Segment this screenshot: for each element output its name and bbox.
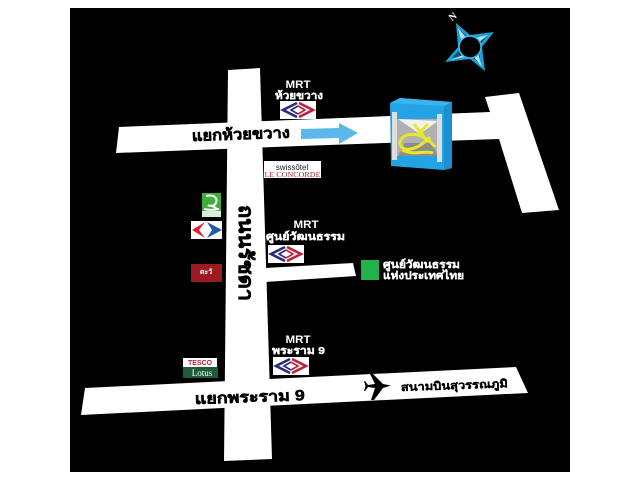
MRT Cultural Centre: ศูนย์วัฒนธรรม: [266, 230, 345, 244]
label: Huai Khwang junction: แยกห้วยขวาง: [192, 125, 290, 145]
MRT Huai Khwang: [275, 79, 323, 119]
MRT Huai Khwang: MRT: [286, 79, 311, 91]
label: Rama 9 junction: แยกพระราม 9: [195, 387, 305, 408]
logo: Tesco Lotus: TESCO: [188, 360, 213, 367]
label: Thailand Cultural Centre: [383, 258, 464, 282]
MRT Rama 9: พระราม 9: [272, 345, 325, 357]
logo: Tesco Lotus: Lotus: [192, 368, 213, 378]
label: airport: สนามบินสุวรรณภูมิ: [401, 377, 508, 395]
logo: red store: ตะวั: [200, 268, 213, 276]
icon: destination building: [390, 98, 452, 170]
icon: airplane: [364, 374, 391, 400]
arrow to destination: [301, 123, 358, 144]
logo: Swissotel: [264, 161, 321, 179]
MRT Rama 9: MRT: [286, 334, 311, 346]
MRT Cultural Centre: MRT: [294, 219, 319, 231]
logo: Robinson: [202, 193, 221, 217]
logo: Swissotel: swissôtel: [276, 163, 308, 172]
label: Ratchada road: ถนนรัชดา: [234, 205, 256, 301]
icon: compass: [445, 23, 494, 71]
logo: red store: [191, 264, 222, 282]
logo: Swissotel: LE CONCORDE: [264, 171, 320, 179]
label: Thailand Cultural Centre: ศูนย์วัฒนธรรม: [383, 258, 460, 272]
MRT Cultural Centre: [266, 219, 345, 263]
logo: Tesco Lotus: [183, 358, 218, 378]
roads: [81, 68, 559, 461]
marker: Thailand Cultural Centre: [361, 260, 379, 280]
logo: Carrefour: [191, 221, 222, 239]
map background: [70, 8, 570, 472]
MRT Huai Khwang: ห้วยขวาง: [275, 89, 323, 102]
MRT Rama 9: [272, 334, 325, 375]
compass north label: N: [447, 10, 460, 24]
label: Thailand Cultural Centre: แห่งประเทศไทย: [383, 269, 464, 282]
